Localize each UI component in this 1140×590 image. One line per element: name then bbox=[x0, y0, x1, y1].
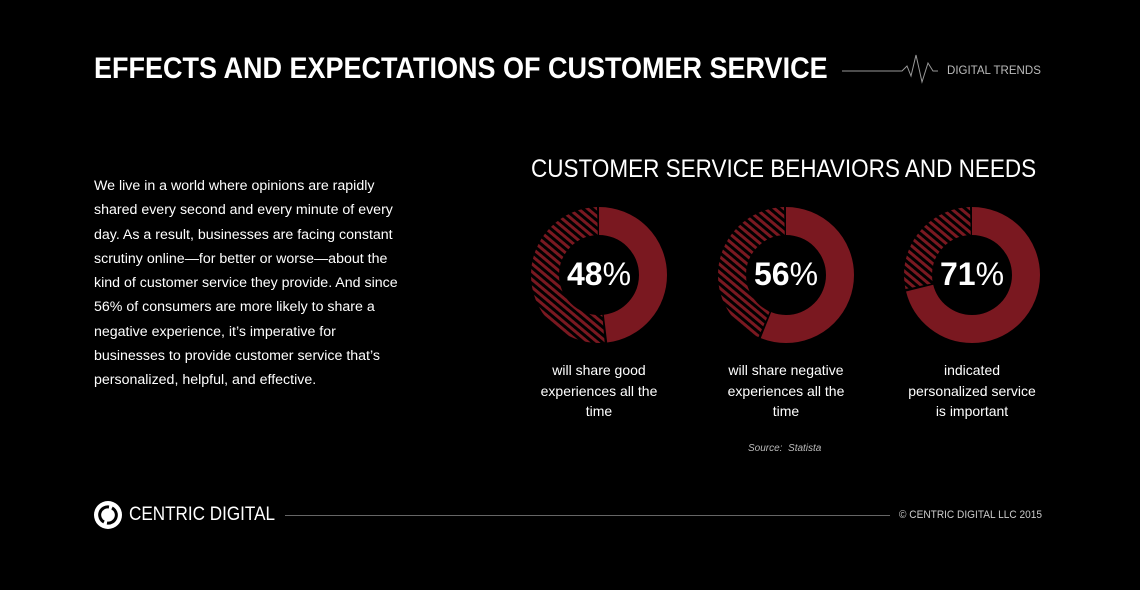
donut 56% bbox=[732, 221, 840, 329]
title: EFFECTS AND EXPECTATIONS OF CUSTOMER SERVICE bbox=[94, 52, 828, 85]
logo bbox=[94, 501, 275, 529]
text: will share negative experiences all the time bbox=[728, 362, 844, 419]
stat labels: will share good experiences all the time bbox=[541, 362, 657, 419]
logo: CENTRIC DIGITAL bbox=[129, 504, 275, 525]
text: indicated bbox=[944, 362, 1000, 378]
chart heading: CUSTOMER SERVICE BEHAVIORS AND NEEDS bbox=[531, 155, 1036, 183]
intro text: We live in a world where opinions are rapidly shared every second and every minute of every day. As a result, businesses are facing constant scrutiny online—for better or worse—about the kind of customer service they provide. And since 56% of consumers are more likely to share a negative experience, it’s imperative for businesses to provide customer service that’s personalized, helpful, and effective. bbox=[94, 178, 398, 388]
copyright: © CENTRIC DIGITAL LLC 2015 bbox=[899, 509, 1042, 521]
text: 56% bbox=[754, 256, 818, 292]
tag: digital trends: DIGITAL TRENDS bbox=[947, 63, 1041, 77]
donut 48% bbox=[545, 221, 653, 329]
donut 71% bbox=[918, 221, 1026, 329]
source: Source: Statista bbox=[748, 443, 821, 454]
text: 71% bbox=[940, 256, 1004, 292]
text: personalized service is important bbox=[908, 382, 1036, 419]
footer line bbox=[285, 515, 890, 516]
stat values: 48% bbox=[567, 256, 631, 292]
icon: pulse line bbox=[842, 54, 938, 84]
